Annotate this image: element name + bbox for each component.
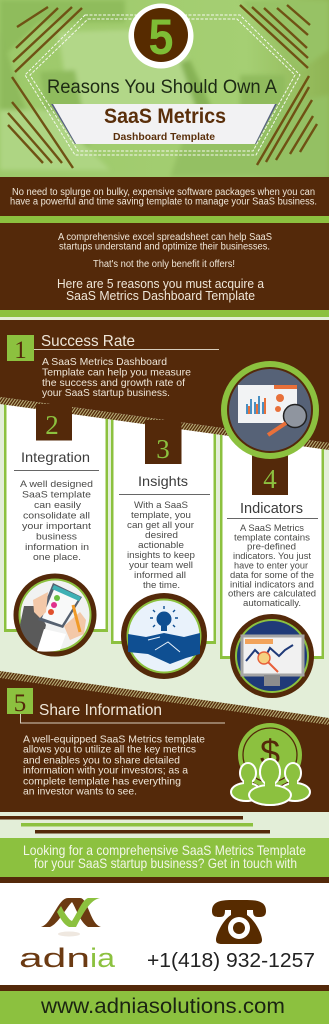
body text: A SaaS Metrics Dashboard <box>42 356 167 368</box>
body text: have to enter your <box>234 561 308 571</box>
hatch lines: corners <box>8 5 317 168</box>
number badge <box>128 4 194 68</box>
number tab 3: 3 <box>156 434 170 464</box>
heading: Indicators <box>240 501 303 517</box>
number tab 4 <box>252 445 288 495</box>
body text: indicators. You just <box>233 551 312 561</box>
title banner: SaaS Metrics <box>104 105 226 128</box>
heading: Share Information <box>39 702 162 719</box>
icon: investors and dollar: $ <box>260 732 280 773</box>
body text: With a SaaS <box>134 500 188 510</box>
icon: handshake and bulb <box>121 593 207 679</box>
body text: complete template has everything <box>23 775 181 787</box>
body text: actionable <box>138 540 184 550</box>
body text: others are calculated <box>228 589 316 599</box>
panel: card 2 integration <box>4 400 108 656</box>
body text: information with your investors; as a <box>23 765 188 777</box>
reasons callout: Here are 5 reasons you must acquire a <box>57 277 264 291</box>
body text: consolidate all <box>23 510 90 522</box>
panel: card 4 indicators <box>220 430 324 659</box>
body text: can easily <box>34 500 81 511</box>
dashed frame <box>25 15 300 155</box>
body text: template, you <box>131 510 191 520</box>
footer rule lines <box>0 816 270 834</box>
body text: insights to keep <box>127 550 195 560</box>
intro text <box>10 187 317 208</box>
panel: reasons intro <box>0 223 329 310</box>
number tab 2: 2 <box>45 410 59 440</box>
icon: investors and dollar <box>232 723 309 806</box>
body text: can get all your <box>127 520 194 530</box>
body text <box>127 500 195 590</box>
icon: monitor with line chart <box>230 614 314 698</box>
number tab 4: 4 <box>263 464 277 494</box>
body text <box>23 734 205 798</box>
body text: template contains <box>234 532 311 542</box>
logo: adnia: adn <box>19 943 90 973</box>
phone number: +1(418) 932-1257 <box>147 950 315 972</box>
body text: Template can help you measure <box>42 366 191 378</box>
body text: initial indicators and <box>230 579 314 589</box>
body text: business <box>36 532 77 542</box>
heading: Reasons You Should Own A <box>47 77 277 98</box>
website url: www.adniasolutions.com <box>40 995 285 1018</box>
panel: call to action <box>0 838 329 877</box>
body text: A well designed <box>20 479 93 490</box>
description text <box>58 232 272 270</box>
panel: reason 5 share information <box>0 671 329 812</box>
body text: allows you to utilize all the key metrics <box>23 744 196 756</box>
body text: your important <box>22 521 91 532</box>
body text: informed all <box>134 570 186 580</box>
number 1: 1 <box>14 337 27 364</box>
body text: A well-equipped SaaS Metrics template <box>23 734 205 746</box>
call to action text <box>23 842 306 871</box>
logo: adnia: ia <box>90 943 116 973</box>
panel: contact <box>0 883 329 985</box>
body text: data for some of the <box>230 570 314 580</box>
description text: A comprehensive excel spreadsheet can help SaaS <box>58 232 272 243</box>
intro text: No need to splurge on bulky, expensive software packages when you can <box>12 187 315 198</box>
body text: desired <box>145 530 178 540</box>
body text: and enables you to share detailed <box>23 754 180 766</box>
body text: automatically. <box>243 598 301 608</box>
number 5 <box>7 688 33 717</box>
icon: report with magnifier <box>221 361 319 459</box>
title banner <box>51 104 277 144</box>
body text: pre-defined <box>247 542 296 552</box>
number badge: 5 <box>148 9 174 65</box>
number 1 <box>7 335 34 364</box>
logo: adnia <box>19 898 116 973</box>
body text: the time. <box>143 580 180 590</box>
heading: Integration <box>21 449 90 465</box>
body text: your SaaS startup business. <box>42 387 170 399</box>
title banner: Dashboard Template <box>113 131 215 143</box>
body text: an investor wants to see. <box>23 786 137 798</box>
number tab 2 <box>36 404 72 440</box>
panel: header <box>0 0 329 177</box>
body text: the success and growth rate of <box>42 377 185 389</box>
heading: Insights <box>138 473 188 489</box>
body text <box>42 356 191 399</box>
panel: intro <box>0 177 329 216</box>
description text: startups understand and optimize their businesses. <box>59 242 270 252</box>
body text: SaaS template <box>22 490 91 500</box>
reasons callout: SaaS Metrics Dashboard Template <box>66 289 255 303</box>
reasons callout <box>57 277 264 303</box>
icon: telephone <box>212 900 266 944</box>
heading: Success Rate <box>41 333 135 350</box>
number tab 3 <box>145 420 182 464</box>
header background photo <box>0 0 329 177</box>
panel: website <box>0 991 329 1024</box>
body text: A SaaS Metrics <box>240 523 305 533</box>
body text <box>228 523 316 608</box>
number 5: 5 <box>14 690 26 717</box>
body text: your team well <box>129 560 193 570</box>
body text: information in <box>25 542 89 553</box>
description text: That's not the only benefit it offers! <box>93 259 235 270</box>
panel: reason 1 success rate <box>0 320 329 450</box>
body text <box>20 479 93 563</box>
panel: card 3 insights <box>111 410 216 679</box>
body text: one place. <box>33 552 81 563</box>
icon: checklist tablet <box>14 574 96 656</box>
